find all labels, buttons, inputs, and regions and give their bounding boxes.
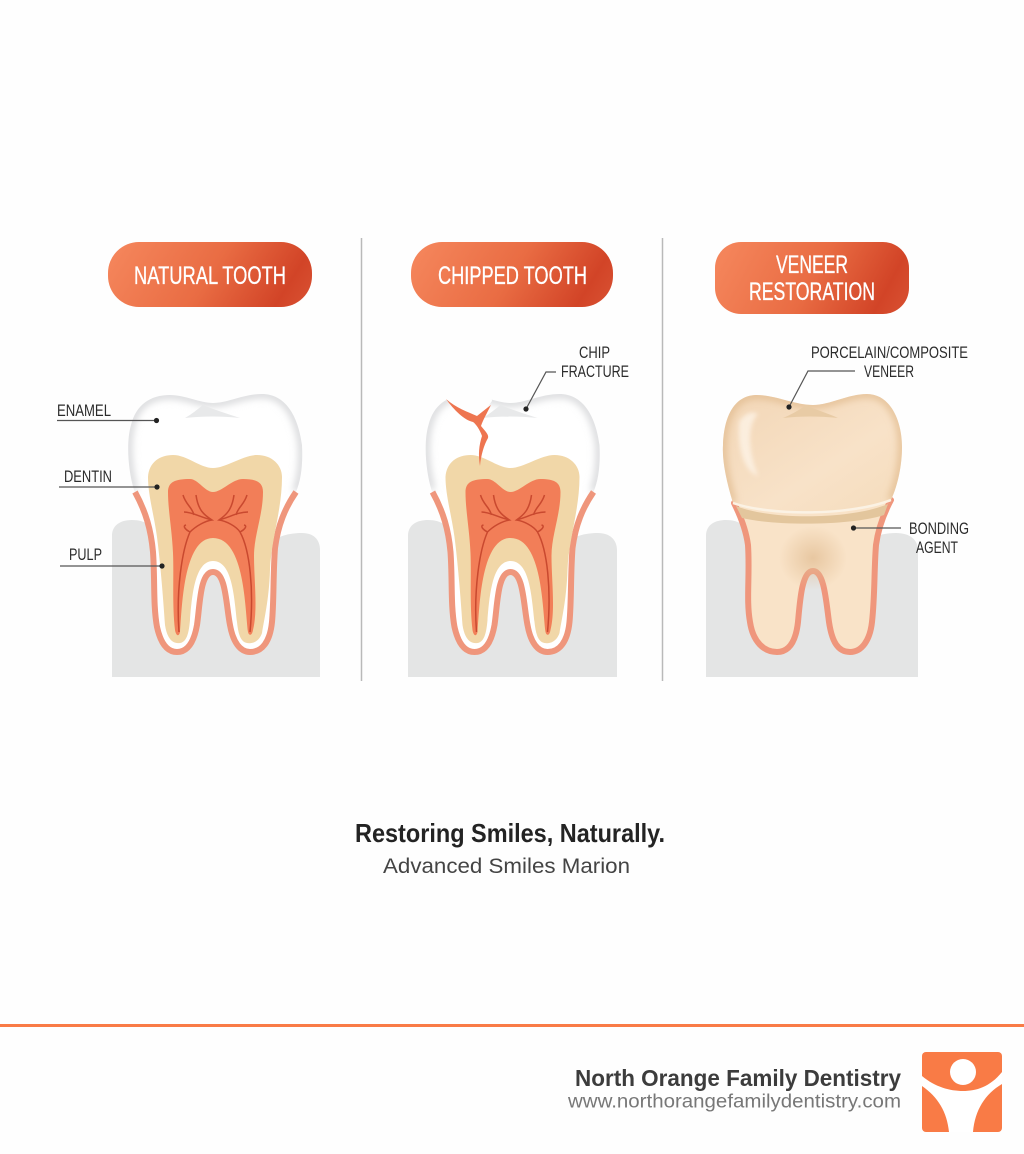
label: porcelain/composite veneer: VENEER — [864, 362, 914, 381]
label: bonding agent — [851, 519, 969, 557]
divider lines — [362, 238, 662, 681]
tagline heading: Restoring Smiles, Naturally. — [355, 818, 665, 848]
label: pulp: PULP — [69, 545, 102, 564]
crown edge shading — [723, 394, 902, 503]
panel: natural tooth — [57, 242, 320, 677]
veneer root — [734, 500, 891, 652]
label: dentin: DENTIN — [64, 467, 112, 486]
heading pill: natural tooth — [108, 242, 312, 307]
veneer crown — [723, 394, 902, 512]
label: enamel: ENAMEL — [57, 401, 111, 420]
crown highlight — [739, 413, 758, 476]
fissure — [783, 405, 838, 418]
tan bonding band — [736, 504, 888, 524]
panel: chipped tooth — [408, 242, 629, 677]
label: porcelain/composite veneer — [786, 343, 968, 410]
gum: natural tooth — [112, 520, 320, 677]
footer url: www.northorangefamilydentistry.com — [567, 1090, 901, 1112]
gum: chipped tooth — [408, 520, 617, 677]
label: chip fracture: FRACTURE — [561, 362, 629, 381]
icon: logo — [922, 1052, 1002, 1132]
label: bonding agent: BONDING — [909, 519, 969, 538]
heading pill: veneer restoration — [715, 242, 909, 314]
heading pill: veneer restoration: RESTORATION — [749, 278, 875, 306]
gum: veneer — [706, 520, 918, 677]
chip notch — [445, 388, 492, 420]
heading pill: chipped tooth — [411, 242, 613, 307]
cream margin line — [733, 500, 891, 512]
footer brand name: North Orange Family Dentistry — [575, 1065, 901, 1091]
label: chip fracture — [523, 343, 629, 412]
label: dentin — [59, 467, 160, 490]
panel: veneer restoration — [706, 242, 969, 677]
heading pill: veneer restoration: VENEER — [776, 251, 848, 279]
crack — [446, 399, 491, 466]
tooth illustration: veneer — [723, 394, 902, 652]
label: pulp — [60, 545, 165, 569]
label: chip fracture: CHIP — [579, 343, 610, 362]
label: porcelain/composite veneer: PORCELAIN/COMPOSITE — [811, 343, 968, 362]
footer rule — [0, 1024, 1024, 1027]
tooth illustration: natural — [128, 394, 302, 652]
practice name: Advanced Smiles Marion — [383, 854, 630, 878]
tooth illustration: chipped — [426, 394, 600, 652]
heading pill: natural tooth: NATURAL TOOTH — [134, 262, 286, 290]
soft root shadow — [779, 526, 847, 590]
label: enamel — [57, 401, 159, 423]
label: bonding agent: AGENT — [916, 538, 958, 557]
heading pill: chipped tooth: CHIPPED TOOTH — [438, 262, 587, 290]
